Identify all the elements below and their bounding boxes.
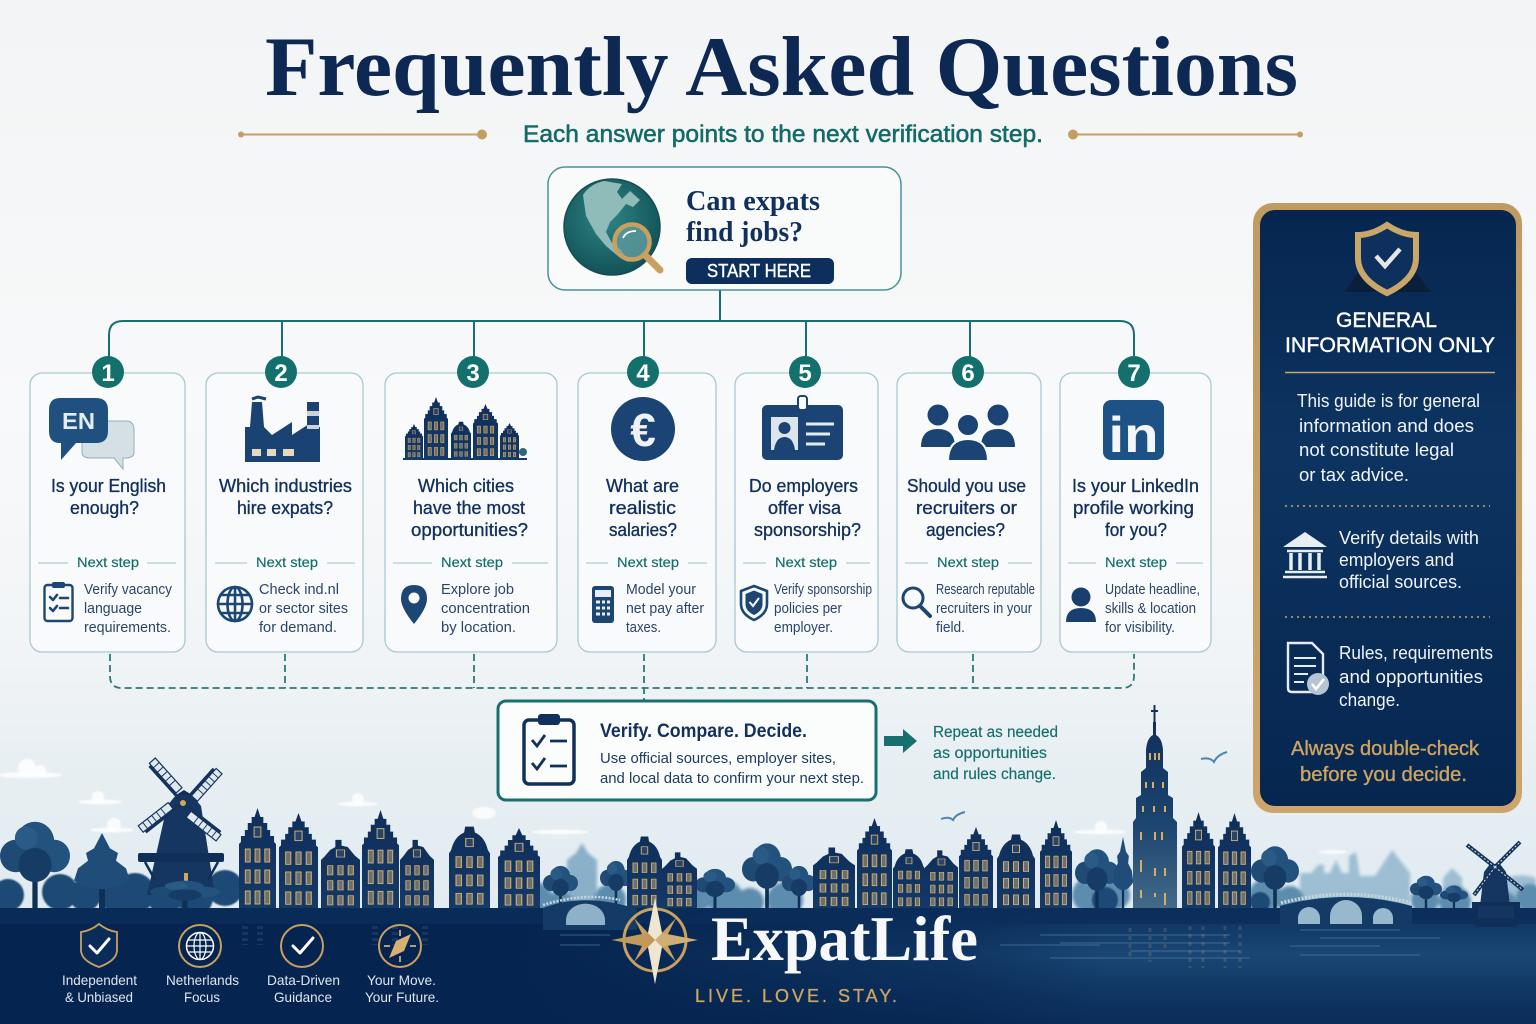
question text: What are — [606, 475, 679, 496]
next step label: Next step — [77, 554, 139, 570]
disclaimer text: or tax advice. — [1299, 464, 1409, 485]
badge: independent and unbiased: Independent — [62, 972, 137, 988]
disclaimer text — [1297, 390, 1480, 485]
next step text: Update headline, — [1105, 582, 1200, 598]
verify details text: official sources. — [1339, 572, 1462, 592]
next step text: recruiters in your — [936, 601, 1032, 617]
question text: sponsorship? — [754, 519, 861, 540]
next step text: for visibility. — [1105, 620, 1175, 636]
verify details text — [1339, 528, 1479, 592]
question text: enough? — [70, 497, 139, 518]
badge: your move your future: Your Future. — [365, 989, 439, 1005]
question text: agencies? — [926, 519, 1005, 540]
heading: Verify. Compare. Decide. — [600, 720, 807, 742]
repeat note: as opportunities — [933, 745, 1047, 762]
icon: person — [1066, 588, 1096, 622]
next step text: by location. — [441, 620, 516, 636]
icon: globe with magnifier — [564, 179, 660, 275]
next step text: for demand. — [259, 620, 337, 636]
repeat note: and rules change. — [933, 766, 1056, 783]
question text: offer visa — [768, 497, 842, 518]
question text: Is your LinkedIn — [1072, 475, 1199, 496]
next step text: Research reputable — [936, 582, 1035, 598]
icon: magnifier — [903, 588, 930, 616]
panel: start question — [548, 167, 901, 290]
panel: question 1 — [30, 356, 185, 652]
rules change text: Rules, requirements — [1339, 643, 1493, 663]
icon: linkedin — [1103, 400, 1164, 463]
icon: calculator — [592, 586, 614, 623]
next step text: taxes. — [626, 620, 661, 636]
flow connectors: questions to verify box — [110, 654, 1134, 700]
badge: your move your future: Your Move. — [367, 972, 436, 988]
icon: euro coin: € — [630, 404, 656, 456]
number badge 3: 3 — [466, 360, 480, 387]
icon: euro coin — [611, 397, 675, 461]
icon: globe — [218, 587, 252, 621]
number badge 7: 7 — [1127, 360, 1141, 387]
rules change text: and opportunities — [1339, 667, 1483, 687]
icon: clipboard — [524, 714, 574, 784]
next step text: policies per — [774, 601, 842, 617]
heading: can expats find jobs — [686, 185, 820, 248]
heading: can expats find jobs: Can expats — [686, 185, 820, 217]
number badge 7 — [1118, 356, 1150, 388]
next step text: employer. — [774, 620, 833, 636]
next step text: requirements. — [84, 620, 171, 636]
water — [0, 908, 1536, 1024]
wordmark: ExpatLife — [711, 903, 978, 974]
badge: netherlands focus: Focus — [184, 989, 220, 1005]
trees — [0, 822, 1468, 910]
next step label — [38, 554, 176, 570]
next step label — [215, 554, 355, 570]
callout: always double-check: before you decide. — [1300, 764, 1467, 786]
panel: verify compare decide — [498, 701, 876, 800]
question text: have the most — [413, 497, 525, 518]
next step label — [905, 554, 1032, 570]
badge: independent and unbiased — [62, 924, 137, 1005]
question text — [51, 475, 166, 518]
skyline background — [0, 759, 1536, 919]
icon: gold shield — [1345, 225, 1431, 293]
body text — [600, 750, 864, 787]
arrow: repeat — [884, 729, 917, 753]
next step text — [936, 582, 1035, 636]
next step text — [259, 582, 348, 636]
icon: location pin — [401, 585, 427, 624]
icon: english speech bubbles: EN — [62, 408, 95, 434]
icon: shield check — [741, 586, 767, 620]
badge: your move your future — [365, 925, 439, 1005]
next step text: Verify vacancy — [84, 582, 173, 598]
subtitle: Each answer points to the next verification step. — [523, 121, 1043, 148]
icon: clipboard checklist — [44, 582, 72, 621]
question text — [219, 475, 352, 518]
next step text: skills & location — [1105, 601, 1196, 617]
logo: expatlife — [612, 898, 978, 1006]
church tower — [1133, 705, 1177, 910]
panel: question 2 — [206, 356, 363, 652]
icon: english speech bubbles — [49, 398, 134, 469]
question text: Which industries — [219, 475, 352, 496]
verify details text: Verify details with — [1339, 528, 1479, 548]
callout: always double-check: Always double-check — [1291, 738, 1480, 760]
next step label: Next step — [256, 554, 318, 570]
body text: Use official sources, employer sites, — [600, 750, 836, 767]
mid-tone hedge behind buildings — [517, 877, 1536, 919]
next step text — [774, 582, 872, 636]
number badge 5 — [789, 356, 821, 388]
icon: id badge — [762, 396, 843, 460]
disclaimer text: This guide is for general — [1297, 390, 1480, 411]
button: start here: START HERE — [707, 261, 811, 281]
next step text — [1105, 582, 1200, 636]
question text: profile working — [1073, 497, 1194, 518]
next step text: net pay after — [626, 601, 704, 617]
heading: GENERAL — [1336, 308, 1437, 332]
panel: question 4 — [578, 356, 716, 652]
badge: data-driven guidance: Data-Driven — [267, 972, 340, 988]
disclaimer text: not constitute legal — [1299, 439, 1454, 460]
question text: Should you use — [907, 475, 1026, 496]
next step label — [1068, 554, 1203, 570]
question text — [907, 475, 1026, 540]
badge: data-driven guidance: Guidance — [274, 989, 332, 1005]
number badge 4 — [627, 356, 659, 388]
question text — [411, 475, 528, 540]
question text: salaries? — [609, 519, 677, 540]
next step text — [441, 582, 530, 636]
birds — [941, 752, 1227, 820]
heading: INFORMATION ONLY — [1285, 333, 1495, 357]
repeat note: Repeat as needed — [933, 724, 1058, 741]
repeat note — [933, 724, 1058, 783]
number badge 6 — [952, 356, 984, 388]
subtitle — [238, 121, 1303, 148]
badge: data-driven guidance — [267, 925, 340, 1005]
footer badges — [62, 924, 439, 1005]
number badge 3 — [457, 356, 489, 388]
next step text — [84, 582, 173, 636]
heading — [1285, 308, 1495, 372]
distant skyline — [567, 843, 1536, 910]
icon: linkedin: in — [1108, 407, 1158, 463]
tagline: LIVE. LOVE. STAY. — [695, 986, 897, 1006]
number badge 1 — [92, 356, 124, 388]
next step label: Next step — [1105, 554, 1167, 570]
next step text: Model your — [626, 582, 696, 598]
clouds — [0, 759, 1347, 854]
houses — [239, 808, 1251, 910]
dark hedge left — [0, 870, 1270, 916]
heading: can expats find jobs: find jobs? — [686, 216, 803, 248]
question text: realistic — [609, 497, 676, 518]
next step label: Next step — [441, 554, 503, 570]
next step text: Check ind.nl — [259, 582, 339, 598]
number badge 2: 2 — [274, 360, 288, 387]
icon: document check — [1288, 643, 1329, 695]
next step text: Explore job — [441, 582, 514, 598]
verify details text: employers and — [1339, 550, 1454, 570]
next step text — [626, 582, 704, 636]
number badge 2 — [265, 356, 297, 388]
question text — [606, 475, 679, 540]
badge: netherlands focus — [166, 925, 239, 1005]
callout: always double-check — [1291, 738, 1480, 786]
flow connectors: start to questions — [109, 290, 1134, 358]
question text: for you? — [1105, 519, 1167, 540]
next step label — [743, 554, 870, 570]
panel: question 3 — [385, 356, 557, 652]
next step label: Next step — [617, 554, 679, 570]
icon: group of people — [921, 404, 1015, 461]
question text: recruiters or — [916, 497, 1017, 518]
rules change text: change. — [1339, 690, 1400, 710]
badge: independent and unbiased: & Unbiased — [65, 989, 133, 1005]
next step label: Next step — [937, 554, 999, 570]
next step label: Next step — [775, 554, 837, 570]
number badge 5: 5 — [798, 360, 812, 387]
button: start here — [686, 258, 834, 284]
next step text: concentration — [441, 601, 530, 617]
question text — [749, 475, 861, 540]
next step label — [586, 554, 707, 570]
number badge 1: 1 — [101, 360, 115, 387]
icon: factory — [245, 397, 320, 462]
question text: Do employers — [749, 475, 858, 496]
body text: and local data to confirm your next step. — [600, 770, 864, 787]
panel: question 7 — [1060, 356, 1211, 652]
panel: question 6 — [897, 356, 1041, 652]
icon: institution — [1283, 532, 1327, 577]
question text: hire expats? — [237, 497, 333, 518]
next step text: field. — [936, 620, 965, 636]
icon: windmill large — [138, 758, 224, 895]
icon: windmill small — [1467, 842, 1523, 927]
question text: opportunities? — [411, 519, 528, 540]
icon: compass rose — [612, 898, 698, 984]
panel: question 5 — [735, 356, 878, 652]
next step text: Verify sponsorship — [774, 582, 872, 598]
badge: netherlands focus: Netherlands — [166, 972, 239, 988]
next step text: or sector sites — [259, 601, 348, 617]
rules change text — [1339, 643, 1493, 710]
number badge 6: 6 — [961, 360, 975, 387]
question text — [1072, 475, 1199, 540]
title: Frequently Asked Questions — [265, 20, 1298, 114]
bridge left — [543, 897, 637, 930]
icon: city houses — [403, 397, 527, 459]
disclaimer text: information and does — [1299, 415, 1474, 436]
panel: general information only — [1253, 203, 1522, 813]
number badge 4: 4 — [636, 360, 650, 387]
question text: Which cities — [418, 475, 514, 496]
bridge right — [1280, 894, 1412, 928]
next step text: language — [84, 601, 142, 617]
question text: Is your English — [51, 475, 166, 496]
